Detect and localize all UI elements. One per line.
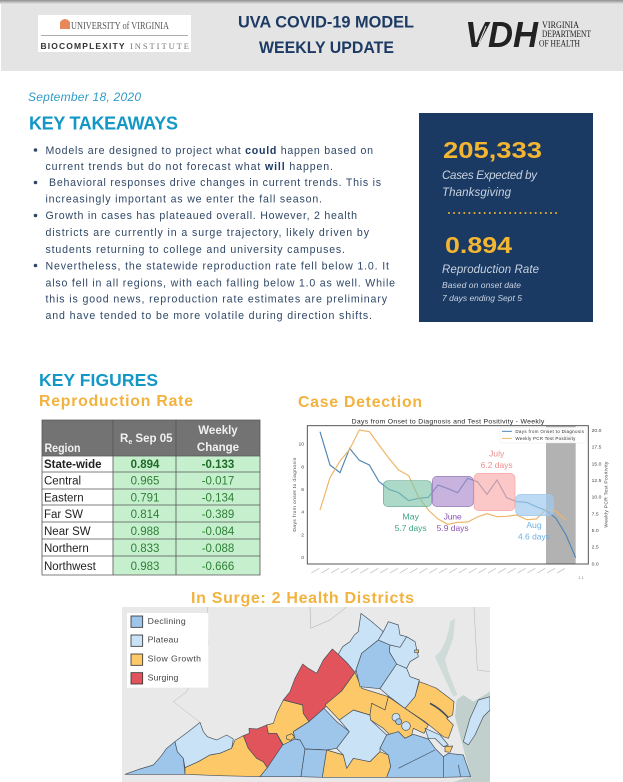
region: plateau northern [378, 622, 418, 668]
logo: VDH: VDH [465, 14, 539, 55]
region: plateau southwest [175, 722, 233, 768]
region: surging Central Shenandoah [283, 649, 355, 722]
map: Virginia health districts [122, 607, 490, 782]
table: reproduction rate by region: R [120, 433, 128, 445]
left axis: 10 [298, 442, 304, 448]
heading: in surge: In Surge: 2 Health Districts [191, 590, 414, 607]
callout: August [516, 494, 553, 541]
table: reproduction rate by region: Northern [44, 543, 89, 555]
title [238, 14, 414, 57]
right axis: Weekly PCR Test Positivity [603, 461, 609, 528]
text block: takeaways: districts are currently in a surge trajectory, likely driven by [46, 227, 370, 239]
text block: takeaways: current trends but do not forecast what will happen. [46, 161, 333, 173]
heading: key figures: KEY FIGURES [39, 370, 158, 390]
text block: takeaways: increasingly important as we enter the fall season. [46, 194, 322, 206]
callout: June: 5.9 days [437, 523, 469, 533]
callout: June: June [444, 512, 462, 522]
right axis: 2.5 [592, 545, 599, 551]
region: declining Rappahannock [356, 640, 397, 689]
stat: cases expected [442, 137, 542, 199]
text block: takeaways: Nevertheless, the statewide reproduction rate fell below 1.0. It [46, 260, 389, 272]
legend: Days from Onset to Diagnosis [515, 429, 585, 434]
table: reproduction rate by region: Region [44, 443, 80, 455]
left axis [292, 442, 304, 561]
date: September 18, 2020 [28, 90, 141, 104]
table: reproduction rate by region: 0.833 [131, 543, 159, 555]
water [453, 692, 490, 782]
text block: takeaways: Behavioral responses drive changes in current trends. This is [49, 177, 381, 189]
table: reproduction rate by region: State-wide [44, 459, 102, 471]
text block: takeaways: students returning to college and university campuses. [46, 244, 345, 256]
left axis: 0 [301, 555, 304, 561]
text block: takeaways: and have tended to be more volatile during direction shifts. [46, 310, 372, 322]
right axis: 5.0 [592, 528, 599, 534]
logo: UVA Biocomplexity Institute [38, 15, 191, 52]
table: reproduction rate by region: 0.983 [131, 561, 159, 573]
region: declining Alleghany south [293, 708, 349, 750]
stat: reproduction rate: Reproduction Rate [442, 264, 539, 276]
panel: headline numbers [419, 113, 593, 322]
logo: VDH: DEPARTMENT [542, 29, 591, 39]
table: reproduction rate by region: Central [44, 476, 81, 488]
table: reproduction rate by region: Weekly [198, 425, 238, 437]
right axis: 20.0 [592, 428, 602, 434]
table: reproduction rate by region: -0.666 [202, 561, 234, 573]
callout: July: July [489, 449, 505, 459]
text block: takeaways: also fell in all regions, with each falling below 1.0 as well. While [46, 278, 395, 290]
table: reproduction rate by region: 0.814 [131, 509, 160, 521]
region: slow growth Roanoke [267, 700, 309, 745]
legend [500, 427, 586, 443]
title: UVA COVID-19 MODEL [238, 14, 414, 32]
table: reproduction rate by region: -0.134 [202, 492, 235, 504]
text block: takeaways: Models are designed to project what could happen based on [46, 145, 373, 157]
stat: cases expected: 205,333 [443, 137, 542, 163]
stat: cases expected: Thanksgiving [442, 187, 512, 199]
header band [0, 0, 623, 71]
legend: district status [127, 613, 208, 688]
left axis: 8 [301, 464, 304, 470]
table: reproduction rate by region: e [128, 439, 132, 446]
heading: case detection: Case Detection [298, 394, 422, 411]
table: reproduction rate by region: Northwest [44, 561, 97, 573]
callout: May [383, 481, 432, 533]
region: slow growth Piedmont [322, 750, 391, 777]
title: WEEKLY UPDATE [259, 39, 394, 57]
right axis [592, 428, 609, 567]
legend: district status: Surging [148, 673, 179, 683]
table: reproduction rate by region: -0.133 [202, 459, 234, 471]
region: slow growth Thomas Jefferson [325, 672, 388, 720]
stat: reproduction rate [442, 232, 539, 303]
region: declining south-east [380, 732, 443, 777]
legend: district status: Slow Growth [148, 654, 201, 664]
legend: district status: Plateau [148, 635, 179, 645]
table: reproduction rate by region: Change [197, 442, 239, 454]
chart title: Days from Onset to Diagnosis and Test Positivity - Weekly [352, 418, 545, 425]
region: plateau Richmond [392, 713, 410, 730]
right axis: 17.5 [592, 445, 602, 451]
region: plateau Lord Fairfax [338, 613, 383, 672]
table: reproduction rate by region: -0.084 [202, 526, 235, 538]
stat: reproduction rate: 0.894 [445, 232, 512, 258]
region: plateau peninsula [425, 728, 448, 747]
callout: July: 6.2 days [481, 460, 513, 470]
table: reproduction rate by region: Eastern [44, 492, 84, 504]
table: reproduction rate by region: Far SW [44, 509, 83, 521]
stat: reproduction rate: Based on onset date [442, 280, 521, 290]
callout: May: 5.7 days [395, 523, 427, 533]
text block: takeaways [34, 145, 395, 322]
chart: days from onset to diagnosis and test positivity: 1 1 [578, 575, 585, 580]
table: reproduction rate by region: 0.894 [131, 459, 160, 471]
biocomplexity: BIOCOMPLEXITY [40, 41, 125, 51]
line: days from onset [320, 432, 576, 558]
right axis: 7.5 [592, 511, 599, 517]
region: plateau Eastern Shore [463, 697, 490, 745]
right axis: 0.0 [592, 561, 599, 567]
left axis: 2 [301, 532, 304, 538]
callout: July [474, 449, 515, 511]
heading: key takeaways: KEY TAKEAWAYS [29, 114, 178, 134]
callout: June [432, 476, 473, 533]
logo: VDH: OF HEALTH [539, 38, 580, 48]
left axis: Days from onset to diagnosis [292, 457, 298, 532]
region: slow growth Three Rivers [405, 682, 454, 738]
stat: cases expected: Cases Expected by [442, 170, 538, 182]
stat: reproduction rate: 7 days ending Sept 5 [442, 293, 522, 303]
university name: UNIVERSITY of VIRGINIA [71, 21, 170, 32]
institute: INSTITUTE [130, 41, 189, 51]
region: plateau central [337, 710, 387, 768]
table: reproduction rate by region: -0.017 [202, 476, 234, 488]
callout: May: May [402, 512, 420, 522]
table: reproduction rate by region: -0.389 [202, 509, 234, 521]
table: reproduction rate by region: -0.088 [202, 543, 234, 555]
table: reproduction rate by region: Near SW [44, 526, 91, 538]
left axis: 6 [301, 487, 304, 493]
right axis: 12.5 [592, 478, 602, 484]
region: slow growth southwest [185, 736, 267, 777]
region: declining far west [125, 742, 185, 774]
table: reproduction rate by region: 0.965 [131, 476, 159, 488]
legend: district status: Declining [148, 616, 186, 626]
legend: Weekly PCR Test Positivity [515, 436, 576, 441]
text block: takeaways: Growth in cases has plateaued overall. However, 2 health [46, 210, 357, 222]
table: reproduction rate by region: 0.988 [131, 526, 159, 538]
icon: rotunda [60, 19, 70, 29]
table: reproduction rate by region: 0.791 [131, 492, 159, 504]
right axis: 10.0 [592, 495, 602, 501]
line: test positivity [320, 430, 566, 524]
callout: August: 4.6 days [518, 531, 551, 541]
text block: takeaways: this is good news, reproduction rate estimates are preliminary [46, 294, 388, 306]
chart: days from onset to diagnosis and test positivity [292, 418, 609, 580]
table: reproduction rate by region: Sep 05 [132, 433, 173, 445]
right axis: 15.0 [592, 461, 602, 467]
logo: VDH [465, 14, 591, 55]
callout: August: Aug [526, 520, 542, 530]
heading: reproduction rate: Reproduction Rate [39, 393, 193, 410]
region: declining Hampton Roads [443, 753, 471, 777]
left axis: 4 [301, 510, 304, 516]
logo: VDH: VIRGINIA [542, 20, 579, 30]
table: reproduction rate by region [42, 420, 260, 575]
region: surging New River [243, 725, 283, 768]
region: plateau Rapidan [380, 664, 419, 708]
